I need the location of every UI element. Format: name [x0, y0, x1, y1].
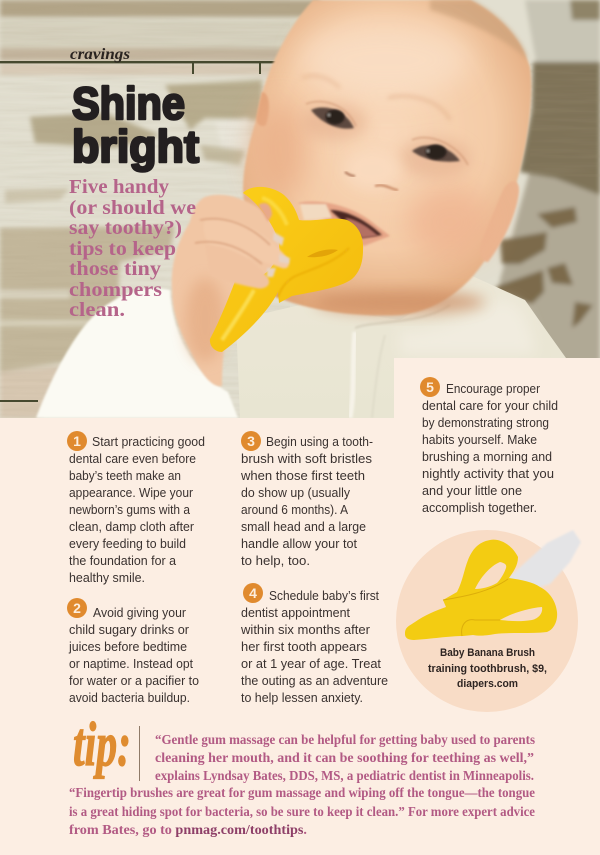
cheeks and shading	[408, 186, 492, 258]
tip 4: or at 1 year of age. Treat	[241, 657, 381, 671]
photo: baby chewing banana toothbrush on wood	[0, 0, 600, 420]
title: bright	[72, 121, 199, 172]
tip 4: dentist appointment	[241, 606, 350, 620]
baby hand and arm	[172, 195, 289, 386]
section label: cravings: cravings	[70, 46, 130, 63]
product caption: Baby Banana Brush	[440, 647, 535, 659]
tip 3	[240, 431, 373, 568]
icon: banana brush product	[405, 530, 581, 640]
title: Shine	[72, 78, 185, 129]
subtitle: say toothy?)	[69, 217, 182, 239]
banana toothbrush in baby's mouth	[195, 187, 363, 352]
tip 2: for water or a pacifier to	[69, 674, 199, 688]
ears	[480, 181, 519, 262]
tip 3: Begin using a tooth-	[266, 435, 373, 449]
tip 1: dental care even before	[69, 452, 196, 466]
mouth	[298, 202, 390, 246]
tip wordmark: tip:	[73, 711, 131, 779]
expert quote: explains Lyndsay Bates, DDS, MS, a pediatric dentist in Minneapolis.	[155, 768, 534, 783]
baby head	[243, 0, 531, 315]
tip 3: do show up (usually	[241, 486, 351, 500]
number badge 4	[243, 583, 263, 603]
tip 3: handle allow your tot	[241, 537, 358, 551]
expert quote: cleaning her mouth, and it can be soothing for teething as well,”	[155, 750, 534, 765]
subtitle: those tiny	[69, 258, 162, 280]
baby body and onesie	[36, 275, 566, 418]
tip 4	[240, 583, 388, 705]
subtitle: tips to keep	[69, 238, 176, 260]
tip 5: habits yourself. Make	[422, 433, 537, 447]
tip 1: appearance. Wipe your	[69, 486, 193, 500]
tip 4: Schedule baby’s first	[269, 589, 379, 603]
subtitle: (or should we	[69, 197, 196, 219]
number badge 2: 2	[73, 600, 81, 616]
tip 3: around 6 months). A	[241, 503, 349, 517]
tip 4: her first tooth appears	[241, 640, 367, 654]
tip 2: avoid bacteria buildup.	[69, 691, 190, 705]
product caption: training toothbrush, $9,	[428, 663, 547, 675]
number badge 4: 4	[249, 585, 257, 601]
tip 5: dental care for your child	[422, 399, 558, 413]
tip 5	[420, 377, 558, 515]
tip 4: to help lessen anxiety.	[241, 691, 363, 705]
wood background	[0, 0, 600, 420]
tip 3: small head and a large	[241, 520, 366, 534]
number badge 5: 5	[426, 379, 434, 395]
product caption	[428, 647, 547, 690]
tip 1	[67, 431, 205, 585]
tip 1: healthy smile.	[69, 571, 145, 585]
expert quote	[69, 732, 535, 837]
tip 1: Start practicing good	[92, 435, 205, 449]
tip 2	[67, 598, 199, 705]
tip 3: when those first teeth	[240, 469, 365, 483]
tip 5: Encourage proper	[446, 382, 540, 396]
nose	[344, 150, 400, 190]
hair	[430, 0, 528, 60]
tip 2: child sugary drinks or	[69, 623, 189, 637]
tip divider	[139, 726, 140, 781]
lower page panel	[0, 418, 600, 855]
subtitle: Five handy	[69, 176, 170, 198]
expert quote: from Bates, go to pnmag.com/toothtips .	[69, 822, 307, 837]
title	[72, 78, 199, 172]
subtitle: chompers	[69, 279, 162, 301]
tip 5: nightly activity that you	[422, 467, 554, 481]
tip 1: baby’s teeth make an	[69, 469, 181, 483]
tip 4: the outing as an adventure	[241, 674, 388, 688]
tip 5: and your little one	[422, 484, 522, 498]
expert quote: is a great hiding spot for bacteria, so be sure to keep it clean.” For more expert advice	[69, 804, 535, 819]
tip 3: brush with soft bristles	[241, 452, 372, 466]
subtitle	[69, 176, 196, 321]
number badge 1	[67, 431, 87, 451]
tip 1: clean, damp cloth after	[69, 520, 194, 534]
tip 2: Avoid giving your	[93, 606, 186, 620]
panel: tip 5 backing box	[394, 358, 600, 538]
tip 5: brushing a morning and	[422, 450, 552, 464]
product circle	[396, 530, 578, 712]
number badge 1: 1	[73, 433, 81, 449]
tip 5: by demonstrating strong	[422, 416, 549, 430]
tip 1: newborn’s gums with a	[69, 503, 190, 517]
fingers over the brush	[258, 203, 272, 222]
tip 4: within six months after	[240, 623, 370, 637]
expert quote: “Fingertip brushes are great for gum massage and wiping off the tongue—the tongue	[69, 785, 535, 800]
eyes	[311, 107, 354, 129]
tip 5: accomplish together.	[422, 501, 537, 515]
tip 2: juices before bedtime	[68, 640, 187, 654]
tip 2: or naptime. Instead opt	[69, 657, 193, 671]
tip 1: the foundation for a	[69, 554, 176, 568]
product caption: diapers.com	[457, 678, 518, 690]
expert quote: “Gentle gum massage can be helpful for getting baby used to parents	[155, 732, 535, 747]
tip 1: every feeding to build	[69, 537, 186, 551]
number badge 3: 3	[247, 433, 255, 449]
tip 3: to help, too.	[241, 554, 310, 568]
subtitle: clean.	[69, 299, 125, 321]
